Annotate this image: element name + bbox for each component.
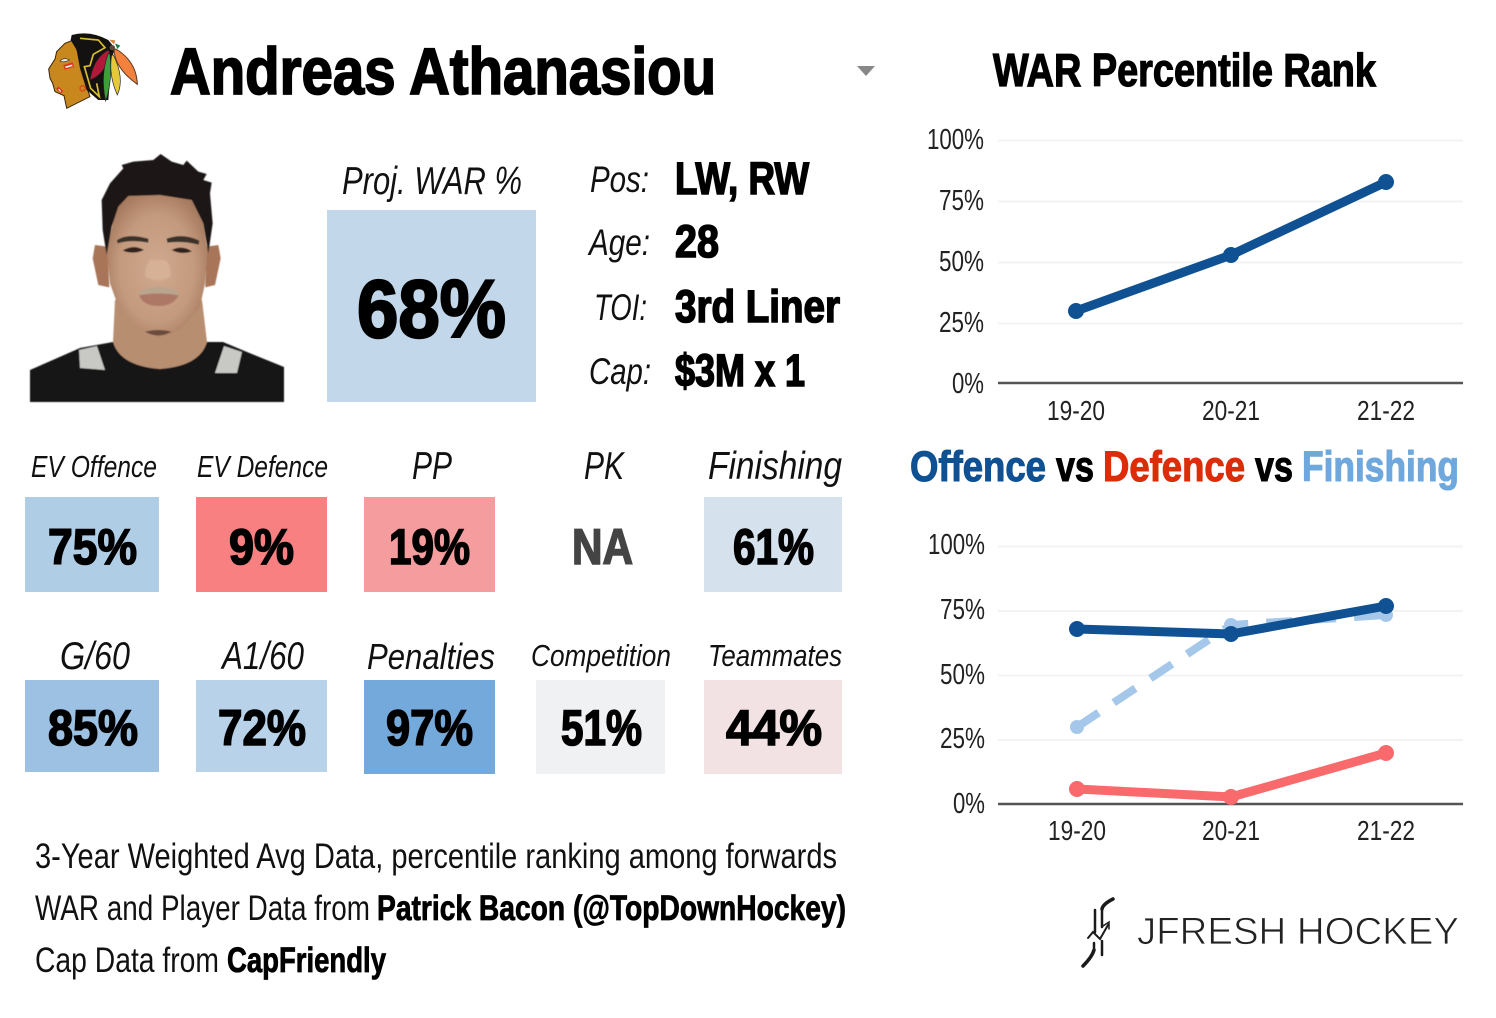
player info: TOI: bbox=[594, 287, 647, 328]
upper lip bbox=[139, 287, 178, 296]
line chart: WAR percentile: 20-21 bbox=[1202, 395, 1260, 426]
footer notes: 3-Year Weighted Avg Data, percentile ranking among forwards bbox=[35, 837, 837, 876]
collar patches bbox=[79, 346, 242, 373]
line chart: WAR percentile: 0% bbox=[952, 368, 984, 400]
line chart: WAR percentile bbox=[927, 124, 1463, 426]
icon: dropdown arrow bbox=[857, 66, 875, 76]
hair bbox=[102, 154, 213, 255]
line chart: WAR percentile: 50% bbox=[939, 246, 984, 278]
icon: crossed sticks bbox=[1083, 899, 1113, 966]
proj war tile bbox=[327, 210, 536, 402]
jersey bbox=[30, 342, 284, 402]
footer notes: CapFriendly bbox=[227, 941, 386, 980]
player photo bbox=[30, 154, 284, 402]
footer notes: Cap Data from bbox=[35, 941, 219, 980]
stat: Penalties: 97% bbox=[386, 700, 473, 756]
icon: team logo bbox=[49, 33, 137, 108]
series: WAR bbox=[1068, 174, 1394, 319]
chin shadow bbox=[145, 330, 172, 335]
line chart: WAR percentile: 25% bbox=[939, 307, 984, 339]
stat: EV Defence: 9% bbox=[229, 519, 294, 575]
series: finishing bbox=[1070, 608, 1393, 734]
line chart: WAR percentile: 75% bbox=[939, 185, 984, 217]
player info: 3rd Liner bbox=[675, 281, 840, 332]
wordmark: JFRESH HOCKEY bbox=[1137, 911, 1459, 953]
line chart: offence defence finishing: 75% bbox=[940, 594, 985, 626]
stat: PK bbox=[572, 445, 633, 575]
line chart: offence defence finishing: 21-22 bbox=[1357, 815, 1415, 846]
proj war tile: 68% bbox=[357, 264, 506, 355]
face bbox=[107, 194, 207, 337]
player info: 28 bbox=[675, 216, 719, 267]
player info: $3M x 1 bbox=[675, 345, 805, 396]
stat: Teammates: 44% bbox=[726, 700, 822, 756]
line chart: WAR percentile: 19-20 bbox=[1047, 395, 1105, 426]
heading: offence vs defence vs finishing: Finishing bbox=[1302, 443, 1459, 491]
line chart: offence defence finishing bbox=[928, 529, 1463, 846]
lips bbox=[139, 293, 179, 306]
series: offence bbox=[1069, 598, 1394, 642]
stat: Penalties bbox=[364, 636, 495, 774]
player info: Pos: bbox=[590, 159, 649, 200]
stat: A1/60 bbox=[196, 635, 327, 772]
stat: G/60: 85% bbox=[48, 700, 138, 756]
line chart: offence defence finishing: 19-20 bbox=[1048, 815, 1106, 846]
stat: PK: PK bbox=[584, 445, 626, 488]
footer notes bbox=[35, 837, 846, 980]
line chart: WAR percentile: 21-22 bbox=[1357, 395, 1415, 426]
stat: A1/60: 72% bbox=[218, 700, 306, 756]
player info bbox=[587, 153, 840, 396]
stat: Finishing bbox=[704, 445, 842, 592]
stat: PK: NA bbox=[572, 519, 633, 575]
stat: Competition: Competition bbox=[531, 638, 671, 673]
stat: EV Offence: 75% bbox=[48, 519, 137, 575]
heading: offence vs defence vs finishing: vs bbox=[1255, 443, 1293, 491]
head bbox=[93, 154, 221, 337]
ears bbox=[93, 245, 221, 287]
line chart: offence defence finishing: 25% bbox=[940, 723, 985, 755]
title: Andreas Athanasiou bbox=[170, 34, 716, 108]
stat: EV Defence bbox=[196, 449, 328, 592]
stat: Finishing: 61% bbox=[733, 519, 814, 575]
player info: Cap: bbox=[589, 351, 651, 392]
brows bbox=[117, 236, 199, 245]
stat: G/60: G/60 bbox=[60, 635, 130, 678]
stat: Teammates: Teammates bbox=[708, 638, 842, 673]
eyes bbox=[123, 247, 192, 253]
stat: PP: PP bbox=[412, 445, 452, 488]
player info: Age: bbox=[587, 222, 650, 263]
stat: EV Offence: EV Offence bbox=[31, 449, 157, 484]
heading: offence vs defence vs finishing bbox=[910, 443, 1459, 491]
line chart: offence defence finishing: 20-21 bbox=[1202, 815, 1260, 846]
stat: Competition: 51% bbox=[561, 700, 642, 756]
stat: Finishing: Finishing bbox=[708, 445, 842, 488]
neck bbox=[113, 300, 207, 369]
heading: offence vs defence vs finishing: Offence bbox=[910, 443, 1046, 491]
stat: G/60 bbox=[25, 635, 159, 772]
line chart: offence defence finishing: 0% bbox=[953, 788, 985, 820]
heading: offence vs defence vs finishing: vs bbox=[1056, 443, 1094, 491]
heading: WAR percentile rank: WAR Percentile Rank bbox=[993, 44, 1376, 96]
series: defence bbox=[1069, 745, 1394, 805]
nose shade bbox=[145, 260, 171, 280]
heading: offence vs defence vs finishing: Defence bbox=[1103, 443, 1245, 491]
stat: PP: 19% bbox=[389, 519, 470, 575]
stat: Teammates bbox=[704, 638, 842, 774]
line chart: offence defence finishing: 50% bbox=[940, 659, 985, 691]
proj war label: Proj. WAR % bbox=[342, 160, 522, 203]
logo: JFresh Hockey bbox=[1083, 899, 1459, 966]
footer notes: Patrick Bacon (@TopDownHockey) bbox=[377, 889, 846, 928]
stat: Competition bbox=[531, 638, 671, 774]
line chart: offence defence finishing: 100% bbox=[928, 529, 985, 561]
stat: EV Defence: EV Defence bbox=[197, 449, 328, 484]
line chart: WAR percentile: 100% bbox=[927, 124, 984, 156]
stat: Penalties: Penalties bbox=[367, 636, 495, 677]
stat: EV Offence bbox=[25, 449, 159, 592]
footer notes: WAR and Player Data from bbox=[35, 889, 370, 928]
player info: LW, RW bbox=[675, 153, 809, 204]
stat: PP bbox=[364, 445, 495, 592]
stat: A1/60: A1/60 bbox=[220, 635, 304, 678]
